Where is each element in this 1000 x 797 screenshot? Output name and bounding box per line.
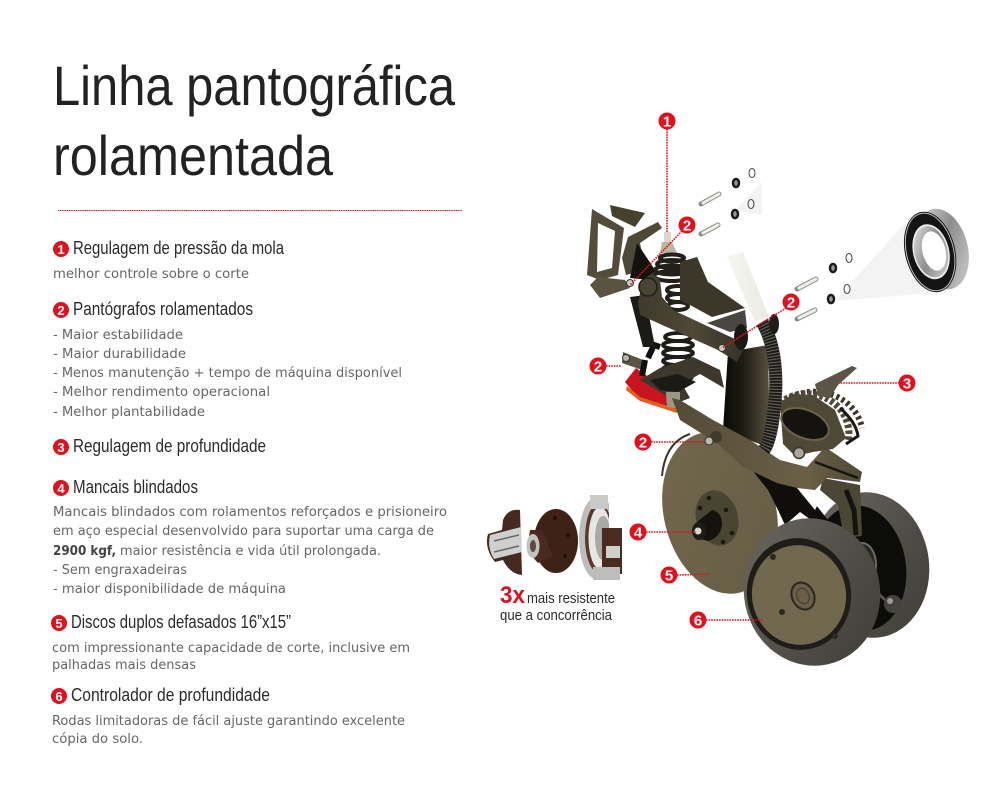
marker 1 bbox=[658, 112, 676, 130]
marker 3: 3 bbox=[903, 376, 911, 392]
front wheel bbox=[730, 505, 894, 679]
marker 2 top: 2 bbox=[683, 218, 691, 234]
heading: item 5: Discos duplos defasados 16”x15” bbox=[71, 612, 291, 632]
heading: item 2: Pantógrafos rolamentados bbox=[73, 299, 253, 319]
callout: 3x more resistant: que a concorrência bbox=[500, 607, 613, 624]
marker 6 bbox=[690, 612, 706, 630]
bearing assembly inset bbox=[487, 490, 625, 580]
description: item 6 bbox=[52, 714, 405, 747]
projection cones bbox=[735, 182, 932, 301]
white seed tube bbox=[727, 252, 769, 322]
marker 6: 6 bbox=[694, 612, 702, 630]
callout: 3x more resistant: 3x bbox=[500, 582, 526, 609]
marker 5: 5 bbox=[665, 568, 673, 584]
red plate bbox=[625, 368, 677, 413]
text block: item 1 bbox=[53, 238, 285, 282]
disc hub bbox=[689, 486, 745, 550]
heading: item 1: Regulagem de pressão da mola bbox=[73, 238, 285, 258]
left bracket bbox=[587, 205, 662, 347]
marker 2 top bbox=[678, 216, 696, 234]
seed disc bbox=[646, 420, 794, 606]
housing half bbox=[487, 510, 522, 575]
list: item 2: - Maior estabilidade bbox=[53, 328, 183, 343]
exploded hardware and bearing bbox=[701, 168, 977, 319]
heading: item 3: 3 bbox=[57, 440, 65, 455]
nut on lower arm bbox=[705, 431, 722, 445]
text block: item 5 bbox=[51, 612, 410, 673]
marker 4 bbox=[630, 524, 646, 542]
marker 5 bbox=[660, 566, 678, 584]
heading: item 4: 4 bbox=[57, 481, 65, 496]
list: item 2 bbox=[53, 328, 402, 420]
roller bearing bbox=[579, 490, 625, 580]
title bbox=[53, 54, 456, 187]
description: item 5: palhadas mais densas bbox=[52, 658, 196, 673]
heading: item 4: Mancais blindados bbox=[73, 477, 198, 497]
heading: item 3: Regulagem de profundidade bbox=[73, 436, 266, 456]
callout: 3x more resistant bbox=[500, 582, 615, 624]
icon: large bearing bbox=[896, 203, 977, 298]
hose bbox=[762, 322, 776, 450]
vertical column bbox=[723, 345, 770, 448]
list: item 2: - Menos manutenção + tempo de máquina disponível bbox=[53, 366, 402, 381]
marker 2 lower: 2 bbox=[639, 434, 647, 452]
knob bbox=[884, 595, 902, 613]
description: item 4: - maior disponibilidade de máquina bbox=[53, 582, 286, 597]
heading: item 6: 6 bbox=[55, 689, 63, 704]
leader lines bbox=[606, 129, 899, 620]
list: item 2: - Melhor rendimento operacional bbox=[53, 385, 270, 400]
upper spring and shaft bbox=[654, 232, 690, 310]
text block: item 2 bbox=[53, 299, 402, 420]
text block: item 6 bbox=[51, 685, 405, 747]
gear sector bbox=[777, 366, 862, 478]
marker 2 left bbox=[590, 358, 606, 376]
description: item 4: - Sem engraxadeiras bbox=[53, 563, 187, 578]
marker 1: 1 bbox=[663, 114, 671, 130]
description: item 4: em aço especial desenvolvido para suportar uma carga de bbox=[53, 524, 434, 539]
depth handle bbox=[815, 366, 857, 398]
description: item 4 bbox=[53, 505, 447, 597]
heading: item 1: 1 bbox=[57, 242, 65, 257]
planter machine bbox=[587, 205, 939, 679]
description: item 6: Rodas limitadoras de fácil ajuste garantindo excelente bbox=[52, 714, 405, 729]
lower linkage bbox=[622, 345, 724, 409]
washers bbox=[732, 179, 836, 303]
marker 4: 4 bbox=[634, 524, 643, 542]
title: rolamentada bbox=[53, 124, 334, 187]
lower arm bbox=[672, 398, 862, 490]
marker 2 left: 2 bbox=[594, 358, 602, 376]
description: item 5 bbox=[52, 641, 410, 673]
heading: item 2: 2 bbox=[57, 303, 65, 318]
hub bbox=[526, 509, 578, 573]
description: item 4: maior resistência e vida útil prolongada. bbox=[120, 544, 381, 559]
marker 2 right bbox=[782, 294, 800, 312]
marker 2 lower bbox=[634, 434, 652, 452]
description: item 1: melhor controle sobre o corte bbox=[53, 267, 249, 282]
dark structure behind disc bbox=[752, 470, 828, 530]
heading: item 6: Controlador de profundidade bbox=[71, 685, 270, 705]
callout: 3x more resistant: mais resistente bbox=[527, 590, 615, 607]
description: item 4: Mancais blindados com rolamentos reforçados e prisioneiro bbox=[53, 505, 447, 520]
pins bbox=[701, 194, 816, 319]
marker 2 right: 2 bbox=[787, 294, 795, 312]
title: Linha pantográfica bbox=[53, 54, 456, 117]
description: item 6: cópia do solo. bbox=[52, 732, 143, 747]
text block: item 4 bbox=[53, 477, 447, 597]
upper arm bbox=[622, 257, 779, 362]
list: item 2: - Maior durabilidade bbox=[53, 347, 186, 362]
marker 3 bbox=[898, 374, 916, 392]
rear wheel bbox=[801, 484, 939, 646]
heading: item 5: 5 bbox=[55, 616, 63, 631]
snap rings bbox=[748, 168, 852, 294]
description: item 4: 2900 kgf, bbox=[53, 544, 116, 559]
dotted title rule bbox=[58, 210, 462, 212]
right support leg bbox=[820, 478, 862, 538]
list: item 2: - Melhor plantabilidade bbox=[53, 405, 205, 420]
description: item 5: com impressionante capacidade de corte, inclusive em bbox=[52, 641, 410, 656]
lower spring bbox=[663, 333, 693, 381]
number markers bbox=[590, 112, 916, 630]
